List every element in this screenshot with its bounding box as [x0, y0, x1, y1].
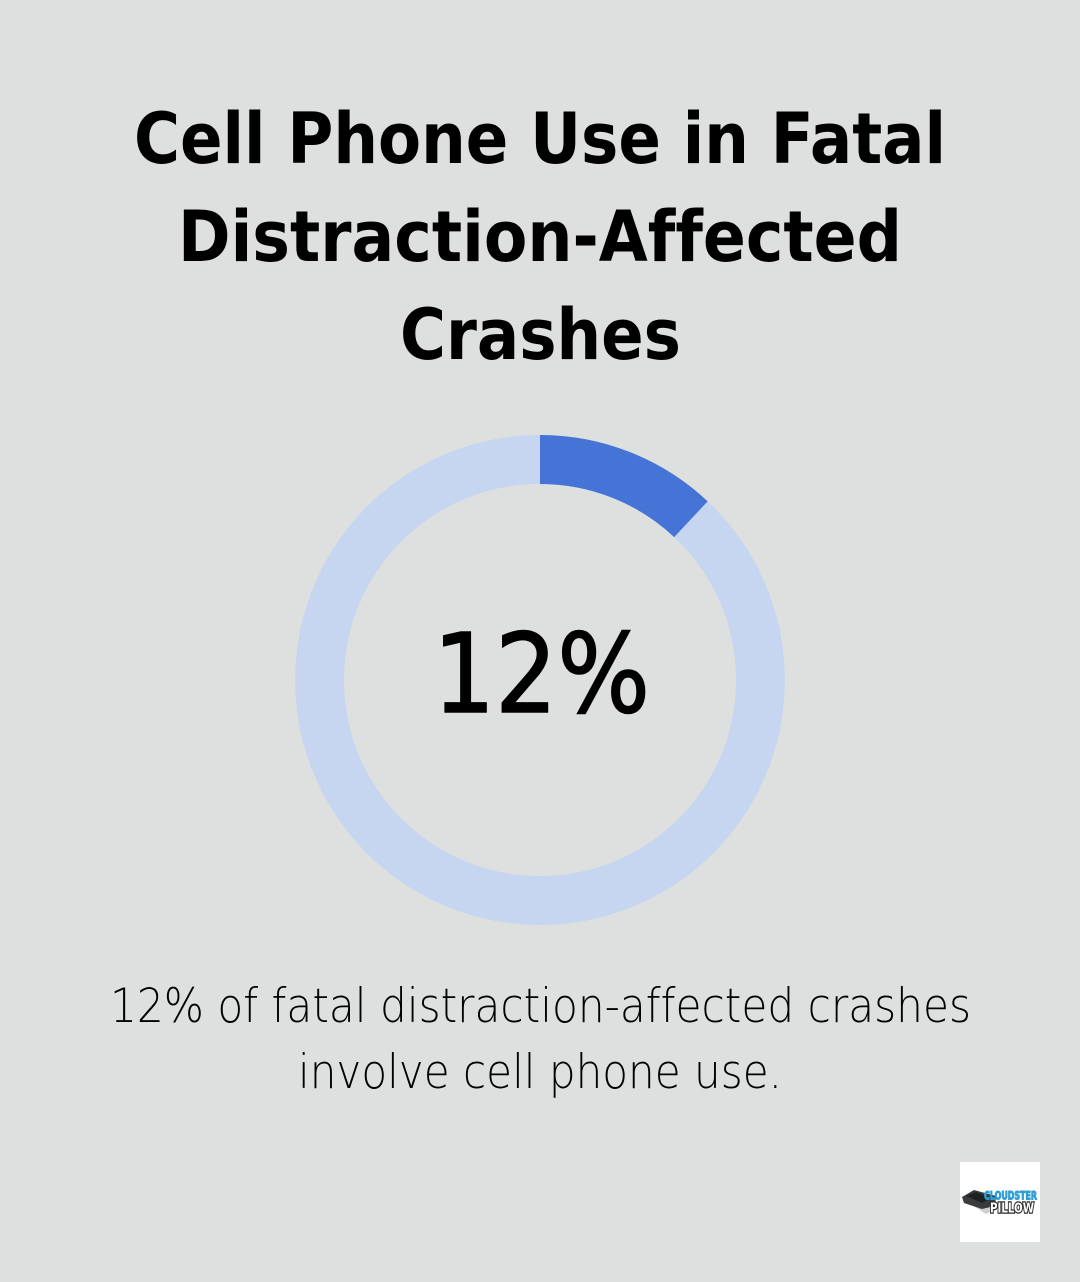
- title: [134, 98, 946, 376]
- center value: 12%: [433, 610, 650, 738]
- icon: pillow: [962, 1190, 996, 1214]
- donut track: [320, 460, 760, 900]
- donut segment: 12%: [540, 460, 691, 519]
- logo wordmark: PILLOW: [990, 1200, 1034, 1216]
- description: involve cell phone use.: [298, 1045, 782, 1100]
- donut chart: [320, 460, 760, 900]
- description: 12% of fatal distraction-affected crashes: [110, 979, 971, 1034]
- logo: Cloudster Pillow: [960, 1162, 1040, 1242]
- logo wordmark: [984, 1188, 1037, 1216]
- description: [110, 979, 971, 1100]
- title: Distraction-Affected: [178, 196, 902, 278]
- title: Cell Phone Use in Fatal: [134, 98, 946, 180]
- logo wordmark: CLOUDSTER: [984, 1188, 1037, 1202]
- title: Crashes: [400, 294, 681, 376]
